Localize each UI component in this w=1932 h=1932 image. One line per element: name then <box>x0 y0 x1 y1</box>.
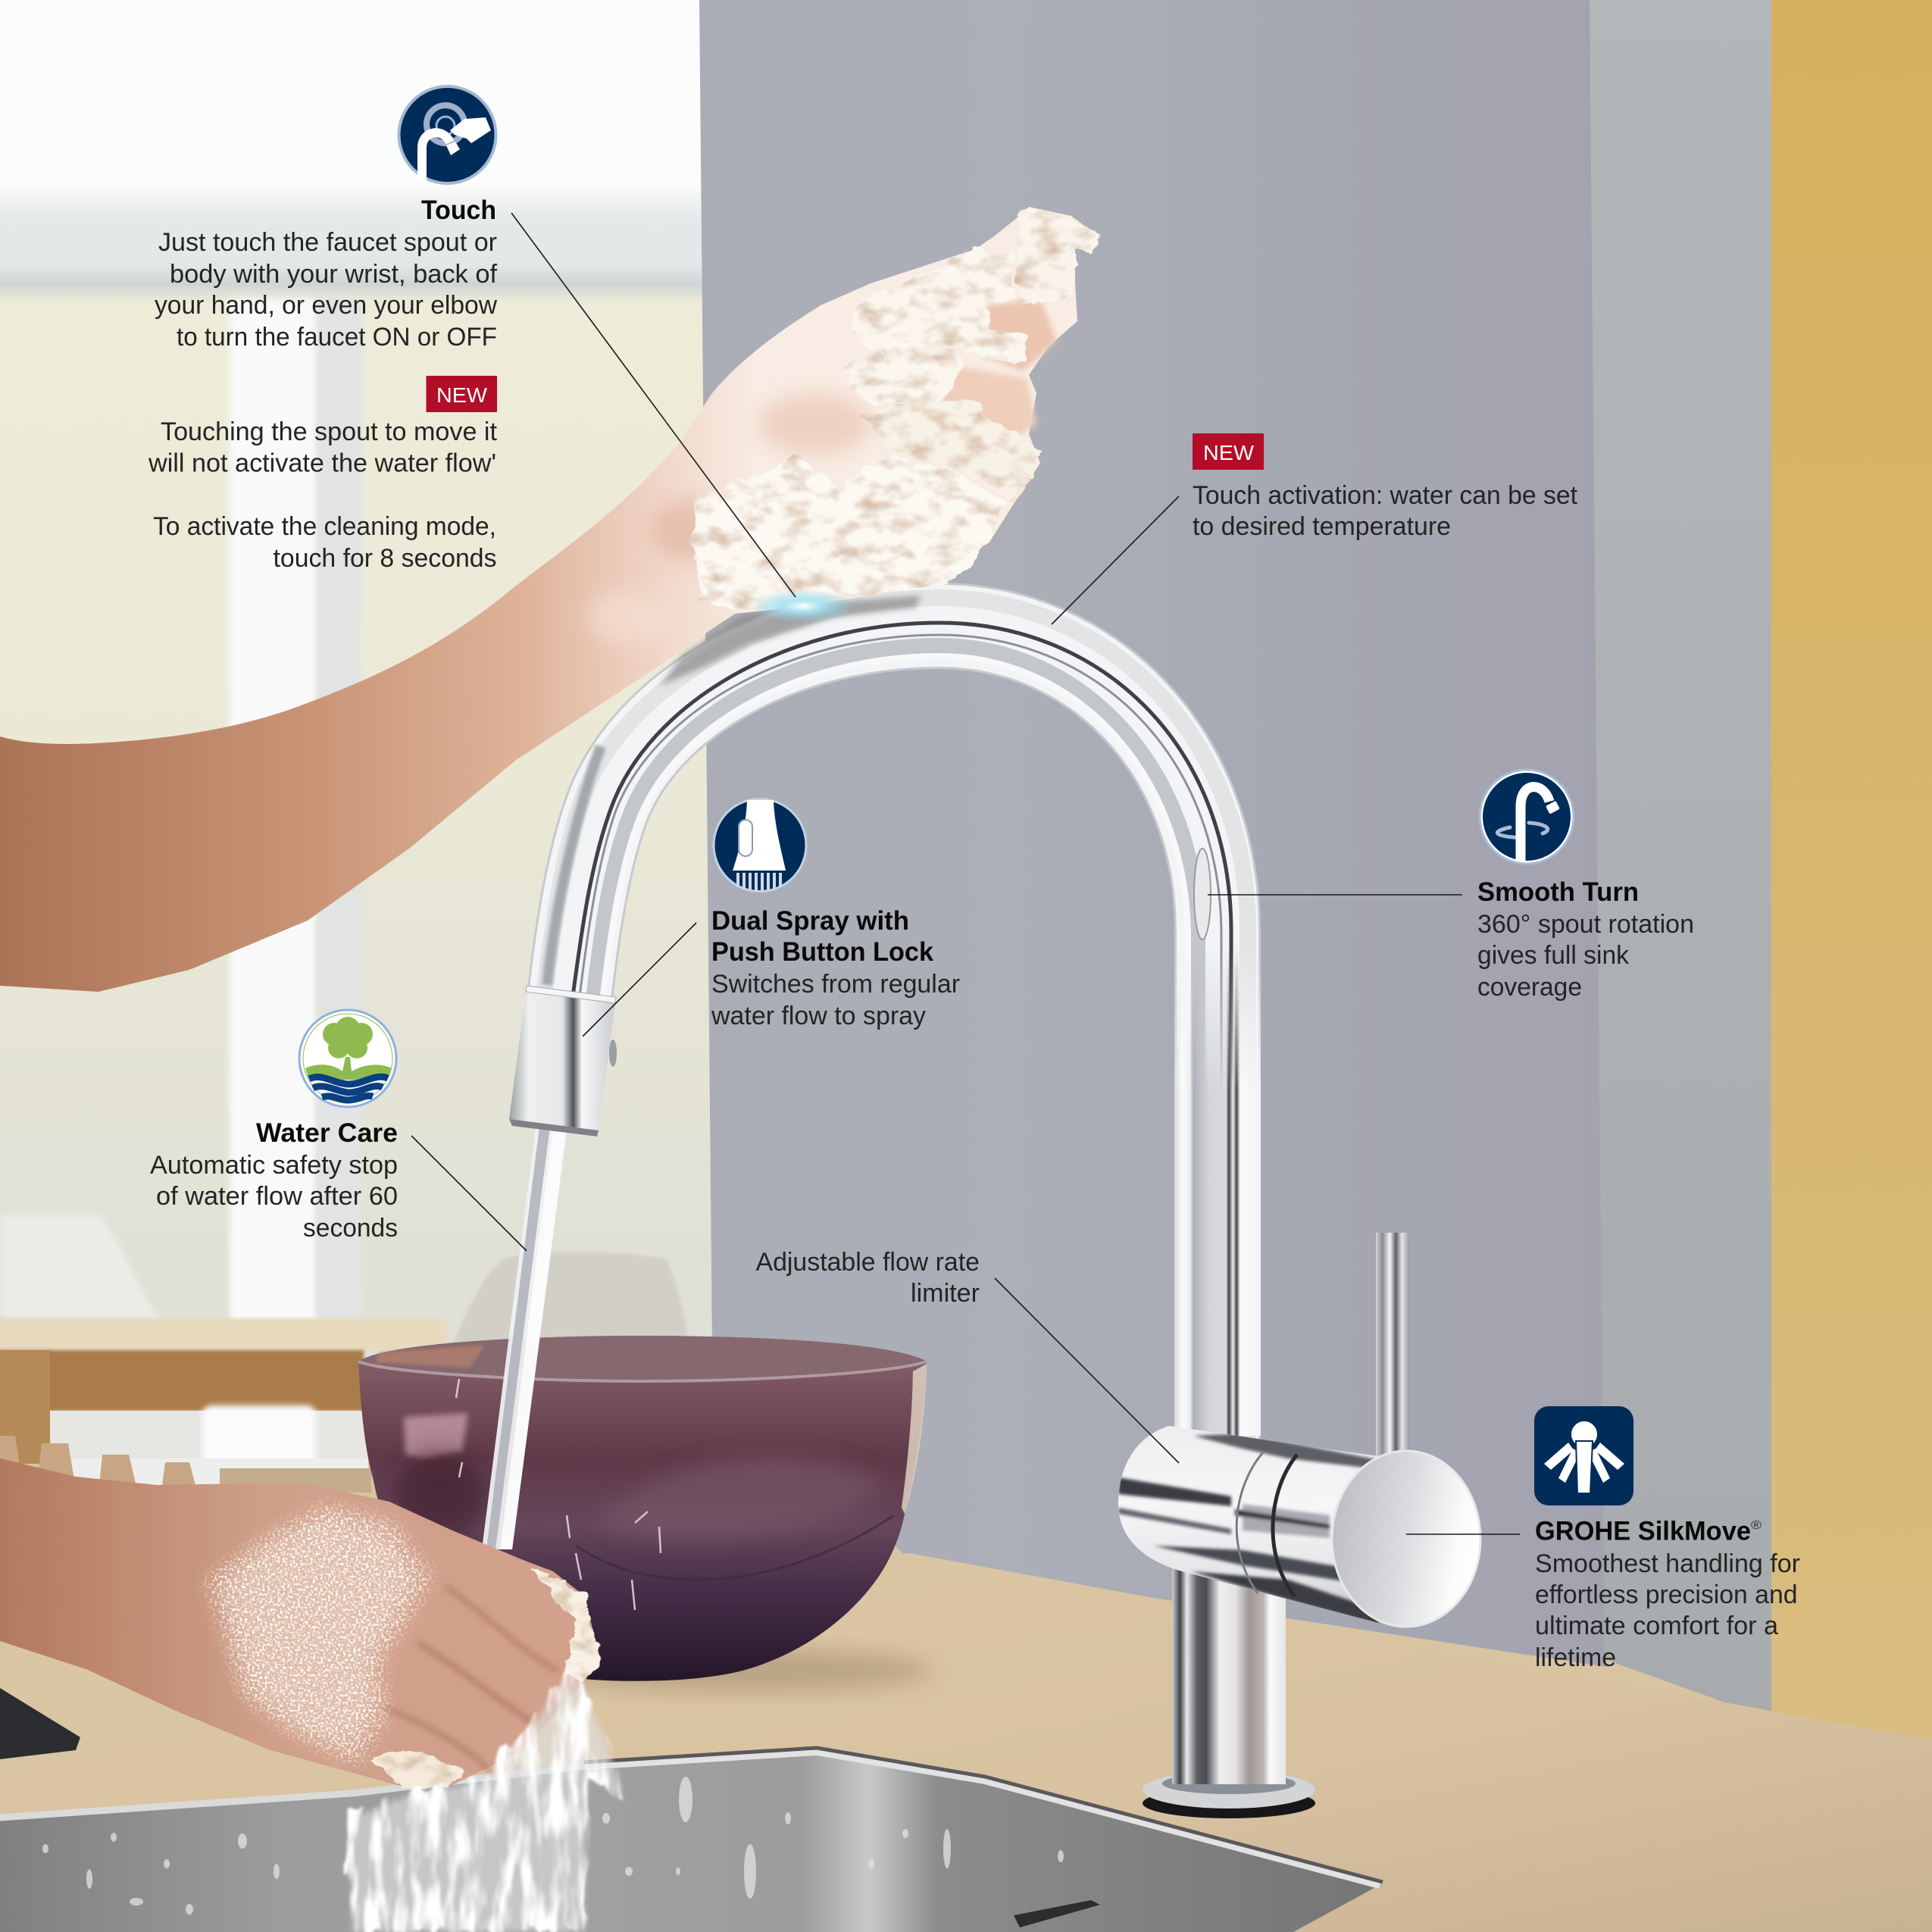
text: dual spray: Push Button Lock <box>711 937 934 967</box>
icon: SilkMove <box>1534 1406 1633 1505</box>
icon: water care <box>299 1010 396 1107</box>
text: touch description <box>155 228 498 352</box>
text: touch description: body with your wrist, back of <box>170 260 498 289</box>
flour residue speckle <box>205 1504 432 1765</box>
text: touch activation <box>1193 481 1578 541</box>
dough on fingertips <box>367 1568 600 1788</box>
text: GROHE SilkMove <box>1535 1517 1800 1672</box>
text: GROHE SilkMove: ® <box>1751 1519 1762 1532</box>
text: spout move note <box>148 417 498 477</box>
text: GROHE SilkMove: GROHE SilkMove <box>1535 1517 1751 1546</box>
heading: Touch: Touch <box>421 195 496 225</box>
text: water care: Water Care <box>256 1118 398 1148</box>
badge: NEW touch: NEW <box>436 383 488 407</box>
text: spout move note: will not activate the water flow' <box>148 449 496 477</box>
skin tones and highlights on the hand <box>587 299 1057 644</box>
lower hand washing <box>0 1458 600 1788</box>
text: dual spray: Dual Spray with <box>711 906 909 936</box>
stainless steel sink <box>0 1748 1383 1932</box>
water splash <box>349 1663 625 1932</box>
text: water care: seconds <box>303 1214 398 1243</box>
flour dough on the hand <box>692 207 1099 614</box>
dark trivet on counter <box>0 1688 80 1759</box>
text: GROHE SilkMove: ultimate comfort for a <box>1535 1612 1778 1640</box>
leader lines <box>411 213 1520 1534</box>
text: touch description: to turn the faucet ON or OFF <box>177 323 497 352</box>
text: dual spray <box>711 906 960 1030</box>
text: cleaning mode note: touch for 8 seconds <box>273 544 497 573</box>
lever <box>1376 1233 1409 1456</box>
touch glow <box>750 589 856 623</box>
icon: touch <box>399 86 496 183</box>
icon: smooth turn <box>1480 770 1574 864</box>
text: GROHE SilkMove: Smoothest handling for <box>1535 1549 1800 1578</box>
upper arm and flour-covered hand <box>0 207 1099 992</box>
badge: NEW activation: NEW <box>1203 441 1255 464</box>
text: smooth turn: Smooth Turn <box>1477 877 1639 907</box>
text: touch activation: Touch activation: water can be set <box>1193 481 1578 510</box>
badge: NEW touch <box>426 376 497 412</box>
badge: NEW activation <box>1193 433 1264 470</box>
background table, chair and tray <box>0 1252 689 1496</box>
text: smooth turn: 360° spout rotation <box>1477 910 1694 939</box>
text: touch activation: to desired temperature <box>1193 512 1451 541</box>
text: GROHE SilkMove: lifetime <box>1535 1643 1616 1672</box>
text: spout move note: Touching the spout to move it <box>161 417 498 446</box>
bowl shadow <box>553 1649 932 1692</box>
text: smooth turn <box>1477 877 1694 1002</box>
text: touch description: your hand, or even your elbow <box>155 291 497 320</box>
text: GROHE SilkMove: effortless precision and <box>1535 1580 1797 1609</box>
text: touch description: Just touch the faucet spout or <box>158 228 497 257</box>
faucet spout tube <box>544 598 1261 1440</box>
text: flow rate limiter <box>756 1248 980 1308</box>
text: water care: Automatic safety stop <box>150 1151 398 1180</box>
text: dual spray: water flow to spray <box>711 1002 926 1030</box>
text: flow rate limiter: limiter <box>911 1279 980 1308</box>
text: cleaning mode note <box>153 512 497 573</box>
text: smooth turn: gives full sink <box>1477 941 1630 970</box>
faucet pedestal <box>1143 1565 1315 1818</box>
text: water care <box>150 1118 398 1243</box>
water stream <box>482 1127 567 1549</box>
hand reflection on spout <box>661 596 921 686</box>
text: cleaning mode note: To activate the cleaning mode, <box>153 512 496 541</box>
text: water care: of water flow after 60 <box>156 1182 398 1211</box>
mixer body <box>1118 1426 1480 1627</box>
icon: dual spray <box>714 799 806 891</box>
spray head <box>509 986 617 1136</box>
chrome faucet <box>509 596 1480 1818</box>
text: dual spray: Switches from regular <box>711 970 960 999</box>
text: smooth turn: coverage <box>1477 973 1582 1002</box>
purple glass bowl <box>358 1336 927 1681</box>
text: flow rate limiter: Adjustable flow rate <box>756 1248 980 1277</box>
countertop <box>0 1553 1932 1932</box>
